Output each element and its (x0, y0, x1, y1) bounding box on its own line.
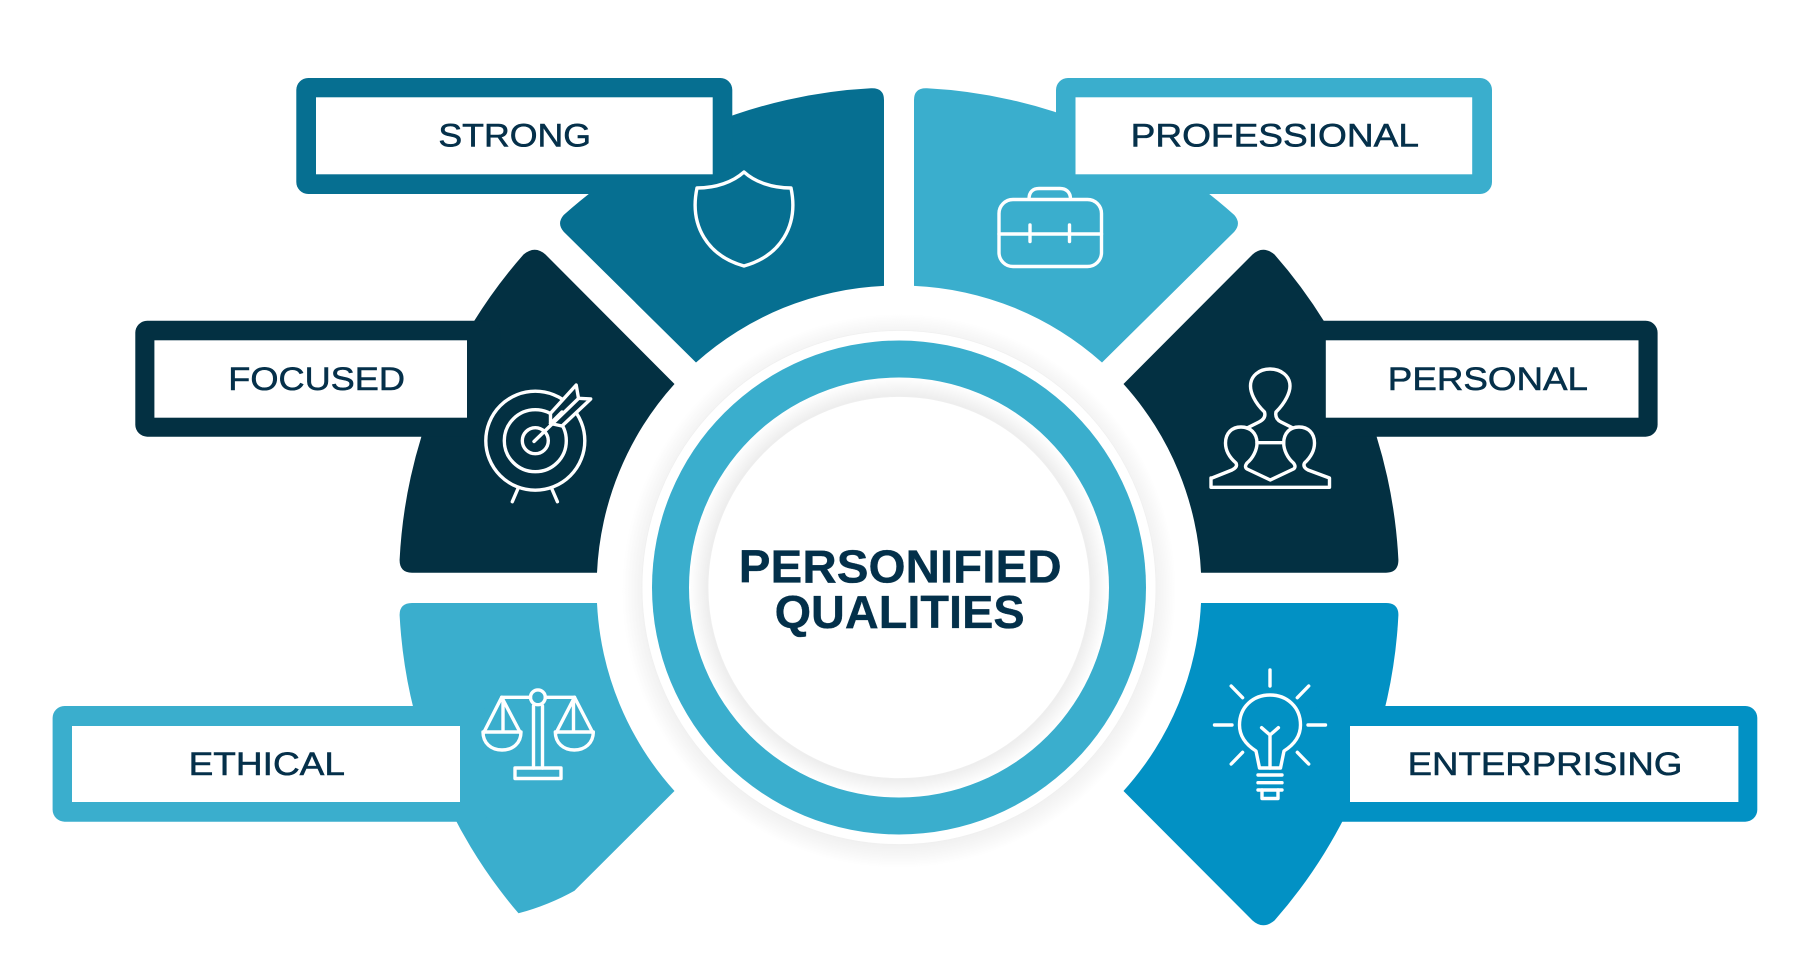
strong label box: STRONG (438, 118, 591, 154)
professional wedge (914, 88, 1238, 362)
blue ring (652, 340, 1146, 834)
professional label box (1056, 78, 1492, 194)
panel: strong (296, 78, 884, 362)
focused wedge (400, 250, 674, 573)
center medallion (622, 314, 1176, 868)
strong wedge (560, 88, 884, 362)
panel: enterprising (1124, 603, 1757, 925)
focused label box (135, 321, 500, 437)
outer shadow (622, 314, 1176, 868)
panel: ethical (53, 603, 675, 913)
personal wedge (1124, 250, 1398, 573)
strong label box (296, 78, 732, 194)
panel: focused (135, 250, 675, 573)
enterprising wedge (1124, 603, 1398, 925)
personal label box: PERSONAL (1388, 361, 1588, 397)
icon: group of people (1211, 369, 1330, 487)
panel: personal (1124, 250, 1658, 573)
ethical label box: ETHICAL (189, 746, 345, 782)
icon: shield (695, 172, 793, 266)
personal label box (1290, 321, 1658, 437)
inner shadow (689, 378, 1109, 798)
white outer ring (642, 330, 1156, 844)
icon: target with arrow (486, 385, 591, 502)
enterprising label box (1310, 706, 1757, 822)
icon: balance scales (483, 690, 593, 778)
professional label box: PROFESSIONAL (1131, 118, 1419, 154)
title (739, 540, 1062, 638)
icon: briefcase (999, 188, 1102, 266)
title: QUALITIES (775, 586, 1025, 638)
icon: light bulb (1214, 670, 1326, 798)
panel: professional (914, 78, 1492, 362)
focused label box: FOCUSED (228, 361, 405, 397)
title: PERSONIFIED (739, 540, 1062, 592)
ethical wedge (400, 603, 674, 913)
enterprising label box: ENTERPRISING (1408, 746, 1682, 782)
white disc (708, 396, 1090, 778)
ethical label box (53, 706, 490, 822)
